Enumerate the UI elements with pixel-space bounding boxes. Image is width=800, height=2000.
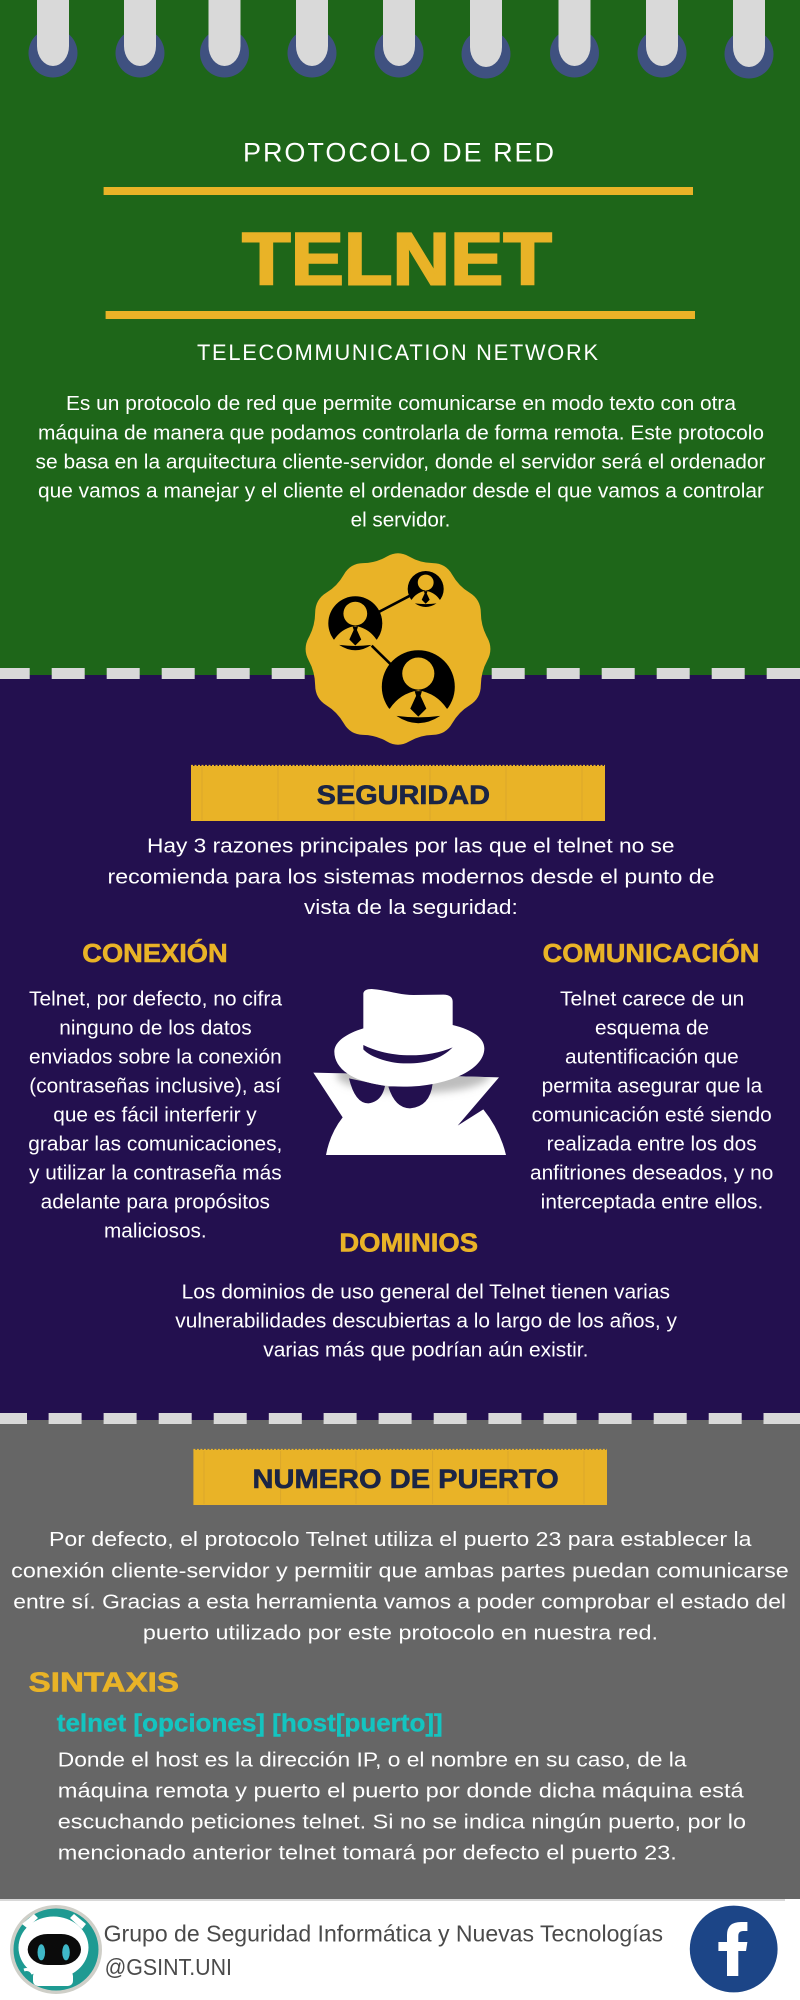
column: dominios	[175, 1228, 678, 1361]
person: top right	[408, 571, 444, 608]
subtitle: telecommunication network: TELECOMMUNICATION NETWORK	[197, 340, 598, 365]
intro text: tres razones	[108, 834, 714, 919]
column: comunicacion: comunicación esté siendo	[532, 1103, 772, 1126]
intro text: tres razones: Hay 3 razones principales por las que el telnet no se	[147, 834, 674, 857]
column: conexion: adelante para propósitos	[41, 1190, 270, 1213]
column: conexion: que es fácil interferir y	[53, 1103, 257, 1126]
text: puerto 23	[11, 1528, 789, 1644]
kicker: protocolo de red: PROTOCOLO DE RED	[243, 138, 554, 168]
intro paragraph	[36, 392, 766, 531]
column: dominios: vulnerabilidades descubiertas a lo largo de los años, y	[175, 1309, 678, 1332]
person: left	[328, 596, 382, 652]
column: comunicacion: interceptada entre ellos.	[541, 1190, 763, 1213]
column: conexion: y utilizar la contraseña más	[29, 1161, 282, 1184]
column: conexion: Telnet, por defecto, no cifra	[29, 987, 283, 1010]
column: comunicacion: realizada entre los dos	[547, 1132, 757, 1155]
column: comunicacion: autentificación que	[565, 1045, 739, 1068]
text: explicacion sintaxis: escuchando peticiones telnet. Si no se indica ningún puerto, por lo	[58, 1811, 746, 1834]
intro paragraph: se basa en la arquitectura cliente-servidor, donde el servidor será el ordenador	[36, 450, 766, 473]
group name: Grupo de Seguridad Informática y Nuevas Tecnologías	[104, 1921, 663, 1947]
column: conexion: ninguno de los datos	[59, 1016, 252, 1039]
text: puerto 23: Por defecto, el protocolo Telnet utiliza el puerto 23 para establecer la	[49, 1528, 752, 1551]
intro paragraph: Es un protocolo de red que permite comunicarse en modo texto con otra	[66, 392, 737, 415]
text: explicacion sintaxis: Donde el host es la dirección IP, o el nombre en su caso, de la	[58, 1749, 687, 1772]
panel: numero de puerto	[0, 1420, 800, 1900]
text: puerto 23: puerto utilizado por este protocolo en nuestra red.	[143, 1621, 658, 1644]
column: conexion: (contraseñas inclusive), así	[29, 1074, 281, 1097]
column: comunicacion: Telnet carece de un	[560, 987, 744, 1010]
icon: network badge	[306, 553, 490, 745]
column: dominios: varias más que podrían aún existir.	[263, 1338, 588, 1361]
spiral notebook binding	[28, 0, 774, 78]
icon: spy with hat	[313, 989, 506, 1155]
ribbon heading: seguridad: SEGURIDAD	[317, 780, 490, 810]
logo: robot	[10, 1905, 102, 1994]
column: dominios: DOMINIOS	[339, 1228, 478, 1258]
column: comunicacion: esquema de	[595, 1016, 709, 1039]
person: bottom	[382, 650, 455, 725]
column: conexion: enviados sobre la conexión	[29, 1045, 282, 1068]
text: explicacion sintaxis: máquina remota y puerto el puerto por donde dicha máquina está	[58, 1780, 744, 1803]
ribbon heading: numero de puerto	[193, 1450, 607, 1505]
column: comunicacion: COMUNICACIÓN	[543, 938, 759, 968]
column: conexion: maliciosos.	[104, 1219, 207, 1242]
column: comunicacion: anfitriones deseados, y no	[530, 1161, 773, 1184]
column: comunicacion: permita asegurar que la	[542, 1074, 763, 1097]
footer	[0, 1899, 800, 2000]
ribbon heading: numero de puerto: NUMERO DE PUERTO	[252, 1464, 559, 1494]
icon: facebook	[690, 1906, 778, 1992]
column: dominios: Los dominios de uso general del Telnet tienen varias	[182, 1280, 670, 1303]
heading: sintaxis: SINTAXIS	[29, 1667, 179, 1698]
command syntax: telnet [opciones] [host[puerto]]	[57, 1710, 443, 1738]
text: explicacion sintaxis: mencionado anterior telnet tomará por defecto el puerto 23.	[58, 1842, 677, 1865]
text: puerto 23: conexión cliente-servidor y permitir que ambas partes puedan comunicarse	[11, 1559, 789, 1582]
handle: @GSINT.UNI	[105, 1954, 232, 1980]
intro paragraph: el servidor.	[351, 508, 450, 531]
text: puerto 23: entre sí. Gracias a esta herramienta vamos a poder comprobar el estado del	[13, 1590, 786, 1613]
intro paragraph: máquina de manera que podamos controlarla de forma remota. Este protocolo	[38, 421, 764, 444]
intro text: tres razones: vista de la seguridad:	[304, 896, 518, 919]
column: conexion: grabar las comunicaciones,	[28, 1132, 282, 1155]
title: TELNET: TELNET	[242, 217, 552, 300]
column: conexion: CONEXIÓN	[82, 938, 228, 968]
text: explicacion sintaxis	[58, 1749, 746, 1865]
panel: header	[0, 0, 800, 675]
panel: seguridad	[0, 675, 800, 1420]
intro text: tres razones: recomienda para los sistemas modernos desde el punto de	[108, 865, 714, 888]
intro paragraph: que vamos a manejar y el cliente el ordenador desde el que vamos a controlar	[38, 479, 764, 502]
ribbon heading: seguridad	[191, 766, 605, 821]
column: conexion	[28, 938, 283, 1242]
column: comunicacion	[530, 938, 773, 1213]
